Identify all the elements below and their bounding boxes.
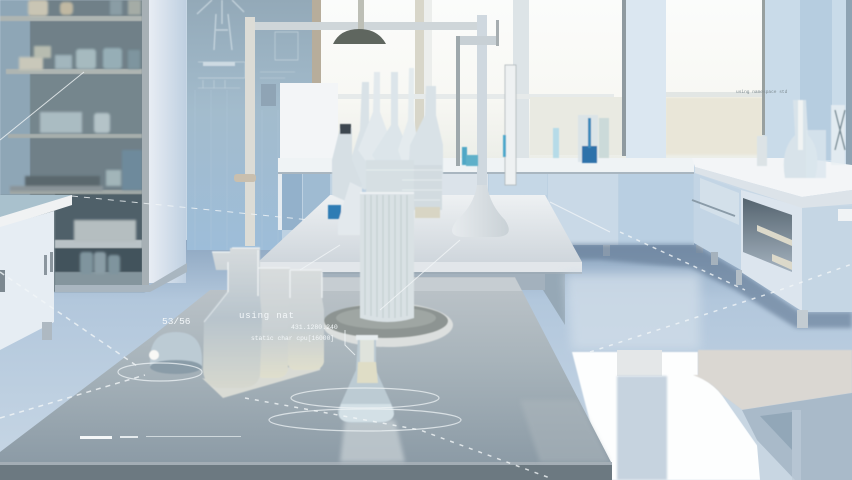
- dish on table: [149, 332, 202, 374]
- wall panels: [187, 0, 852, 250]
- windows: [312, 0, 765, 160]
- HUD bar: [80, 436, 241, 439]
- shelf items: [10, 0, 142, 274]
- HUD text: 53/56: [162, 316, 191, 327]
- shelf unit: [0, 0, 145, 292]
- HUD text: using namespace std: [736, 89, 788, 95]
- HUD text: 431.1280.240: [291, 324, 338, 331]
- HUD text: static char cpu[16000]: [251, 335, 334, 342]
- wall hologram: body: [197, 0, 298, 88]
- shelf side panel: [55, 0, 187, 292]
- white board on counter: [280, 83, 338, 158]
- right counter and cabinets: [692, 158, 852, 328]
- window instruments: [462, 65, 845, 185]
- floor shadow: [282, 244, 852, 328]
- front table: [0, 277, 612, 480]
- left white cabinet: [0, 195, 72, 350]
- back counter: [278, 158, 703, 256]
- wall switch: [261, 84, 276, 106]
- floor reflections: [565, 274, 852, 480]
- middle island: [258, 195, 582, 325]
- bottle rack: [202, 248, 324, 398]
- back flasks: [328, 68, 443, 235]
- floor: [0, 240, 852, 480]
- HUD text: using nat: [239, 311, 295, 321]
- tray with ribbed beaker: [323, 193, 453, 347]
- lamp and stand: [234, 0, 509, 246]
- front flask: [338, 335, 394, 423]
- HUD rings: [118, 363, 461, 431]
- HUD text: [162, 89, 788, 342]
